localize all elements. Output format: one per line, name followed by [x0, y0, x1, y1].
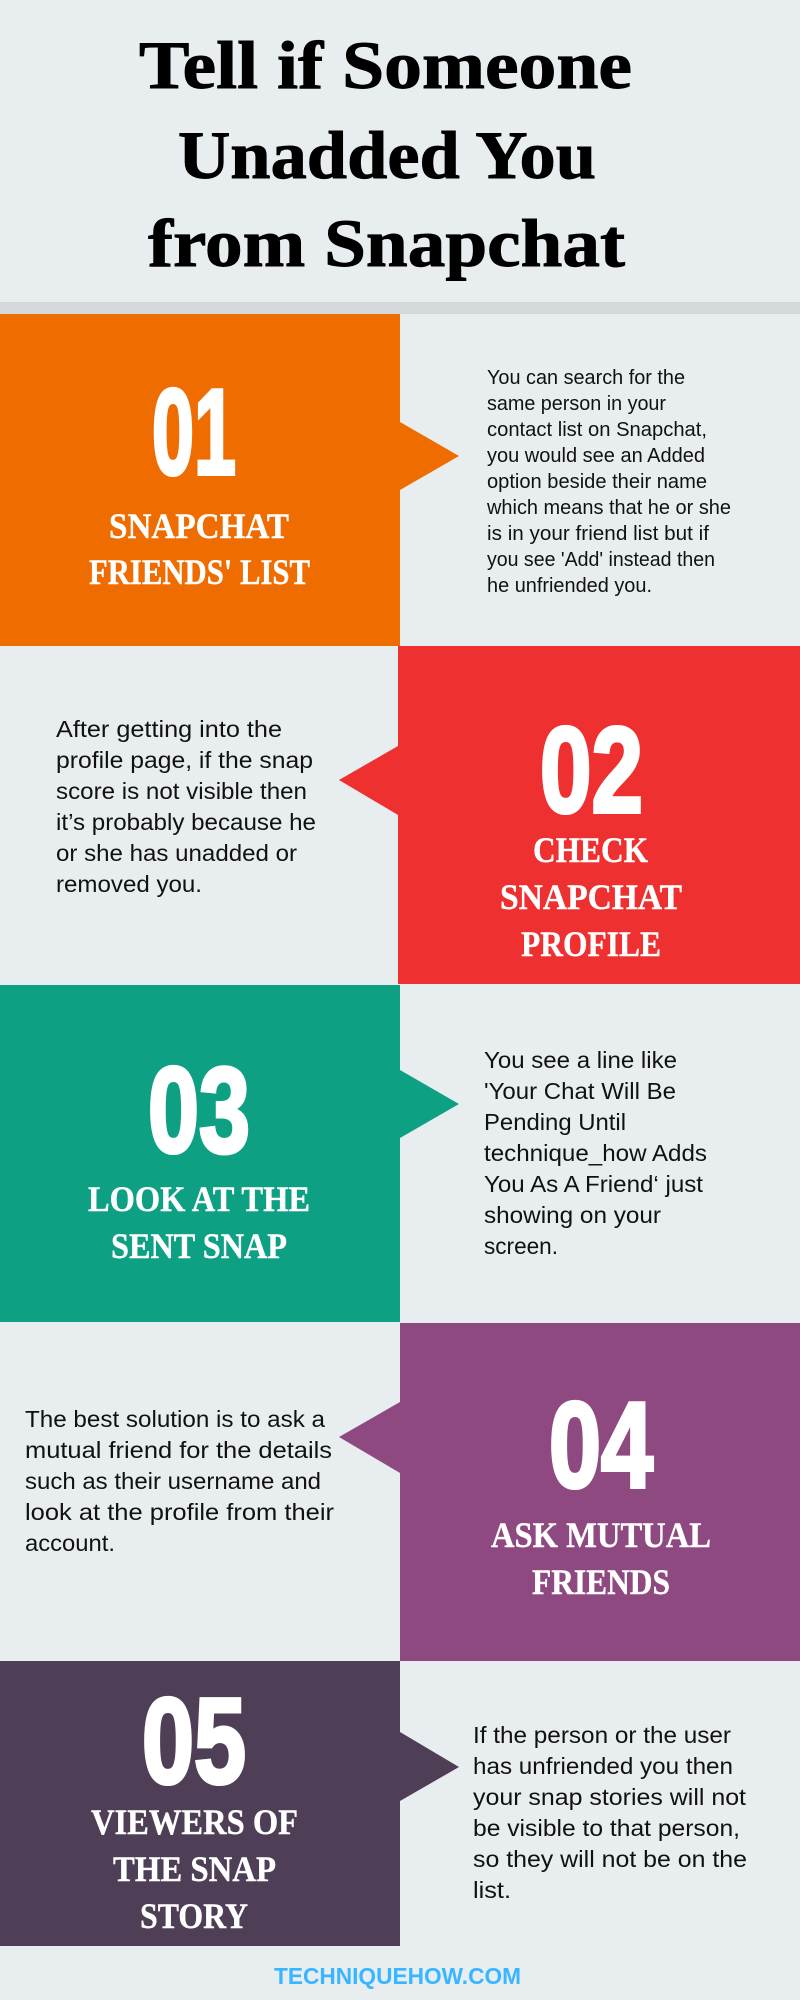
text block: step 3: Pending Until [484, 1109, 626, 1135]
heading: ask mutual friends: FRIENDS [532, 1562, 670, 1602]
panel: step 5 viewers of the snap story [0, 1661, 747, 1946]
text block: step 5: has unfriended you then [473, 1753, 733, 1779]
orange block with arrow [0, 314, 459, 646]
heading: snapchat friends' list: SNAPCHAT [109, 506, 289, 546]
text block: step 1: contact list on Snapchat, [487, 418, 707, 441]
number 01: 01 [152, 364, 236, 500]
text block: step 2: score is not visible then [56, 778, 307, 804]
heading: viewers of the snap story: VIEWERS OF [91, 1802, 298, 1842]
text block: step 2: After getting into the [56, 716, 282, 742]
panel: step 4 ask mutual friends [25, 1323, 800, 1661]
text block: step 3: You As A Friend‘ just [484, 1171, 704, 1197]
heading: look at the sent snap: LOOK AT THE [88, 1179, 310, 1219]
text block: step 4 [25, 1406, 334, 1556]
text block: step 1: option beside their name [487, 470, 707, 493]
text block: step 5: list. [473, 1877, 511, 1903]
title: from Snapchat [148, 205, 625, 281]
text block: step 3: technique_how Adds [484, 1140, 707, 1166]
title: Unadded You [178, 117, 596, 193]
text block: step 1: same person in your [487, 392, 666, 415]
text block: step 5: be visible to that person, [473, 1815, 740, 1841]
panel: step 3 look at the sent snap [0, 985, 707, 1322]
text block: step 2: profile page, if the snap [56, 747, 313, 773]
text block: step 1: which means that he or she [486, 496, 731, 519]
heading: viewers of the snap story: THE SNAP [113, 1849, 276, 1889]
purple block with arrow [339, 1323, 800, 1661]
text block: step 2: it’s probably because he [56, 809, 316, 835]
number 05: 05 [142, 1673, 246, 1809]
heading: look at the sent snap: SENT SNAP [111, 1226, 287, 1266]
dark block with arrow [0, 1661, 459, 1946]
number 03: 03 [148, 1042, 250, 1178]
text block: step 5: your snap stories will not [473, 1784, 747, 1810]
red block with arrow [339, 646, 800, 984]
text block: step 4: such as their username and [25, 1468, 321, 1494]
heading: look at the sent snap [88, 1179, 310, 1266]
heading: check snapchat profile: SNAPCHAT [500, 877, 682, 917]
title: Tell if Someone [139, 27, 632, 103]
heading: check snapchat profile [500, 830, 682, 964]
number 04: 04 [549, 1377, 653, 1513]
text block: step 1: is in your friend list but if [487, 522, 709, 545]
heading: viewers of the snap story [91, 1802, 298, 1936]
footer: site name: TECHNIQUEHOW.COM [274, 1963, 521, 1989]
text block: step 3: screen. [484, 1233, 558, 1259]
panel: step 1 snapchat friends' list [0, 314, 731, 646]
text block: step 1: you see 'Add' instead then [487, 548, 715, 571]
text block: step 2: removed you. [56, 871, 202, 897]
text block: step 2: or she has unadded or [56, 840, 297, 866]
text block: step 3 [484, 1047, 707, 1259]
text block: step 3: You see a line like [484, 1047, 677, 1073]
text block: step 3: showing on your [484, 1202, 661, 1228]
text block: step 5: so they will not be on the [473, 1846, 747, 1872]
text block: step 1 [486, 366, 731, 597]
text block: step 4: The best solution is to ask a [25, 1406, 325, 1432]
text block: step 5: If the person or the user [473, 1722, 731, 1748]
heading: ask mutual friends: ASK MUTUAL [491, 1515, 711, 1555]
heading: check snapchat profile: CHECK [533, 830, 648, 870]
text block: step 4: look at the profile from their [25, 1499, 334, 1525]
heading: snapchat friends' list: FRIENDS' LIST [89, 552, 310, 592]
text block: step 4: account. [25, 1530, 115, 1556]
heading: snapchat friends' list [89, 506, 310, 592]
heading: check snapchat profile: PROFILE [521, 924, 661, 964]
text block: step 1: You can search for the [487, 366, 685, 389]
text block: step 4: mutual friend for the details [25, 1437, 332, 1463]
text block: step 5 [473, 1722, 747, 1903]
heading: ask mutual friends [491, 1515, 711, 1602]
text block: step 2 [56, 716, 316, 897]
text block: step 1: you would see an Added [487, 444, 705, 467]
panel: step 2 check snapchat profile [56, 646, 800, 984]
title [139, 27, 632, 281]
teal block with arrow [0, 985, 459, 1322]
number 02: 02 [540, 702, 643, 838]
heading: viewers of the snap story: STORY [140, 1896, 248, 1936]
text block: step 1: he unfriended you. [487, 574, 652, 597]
text block: step 3: 'Your Chat Will Be [484, 1078, 676, 1104]
